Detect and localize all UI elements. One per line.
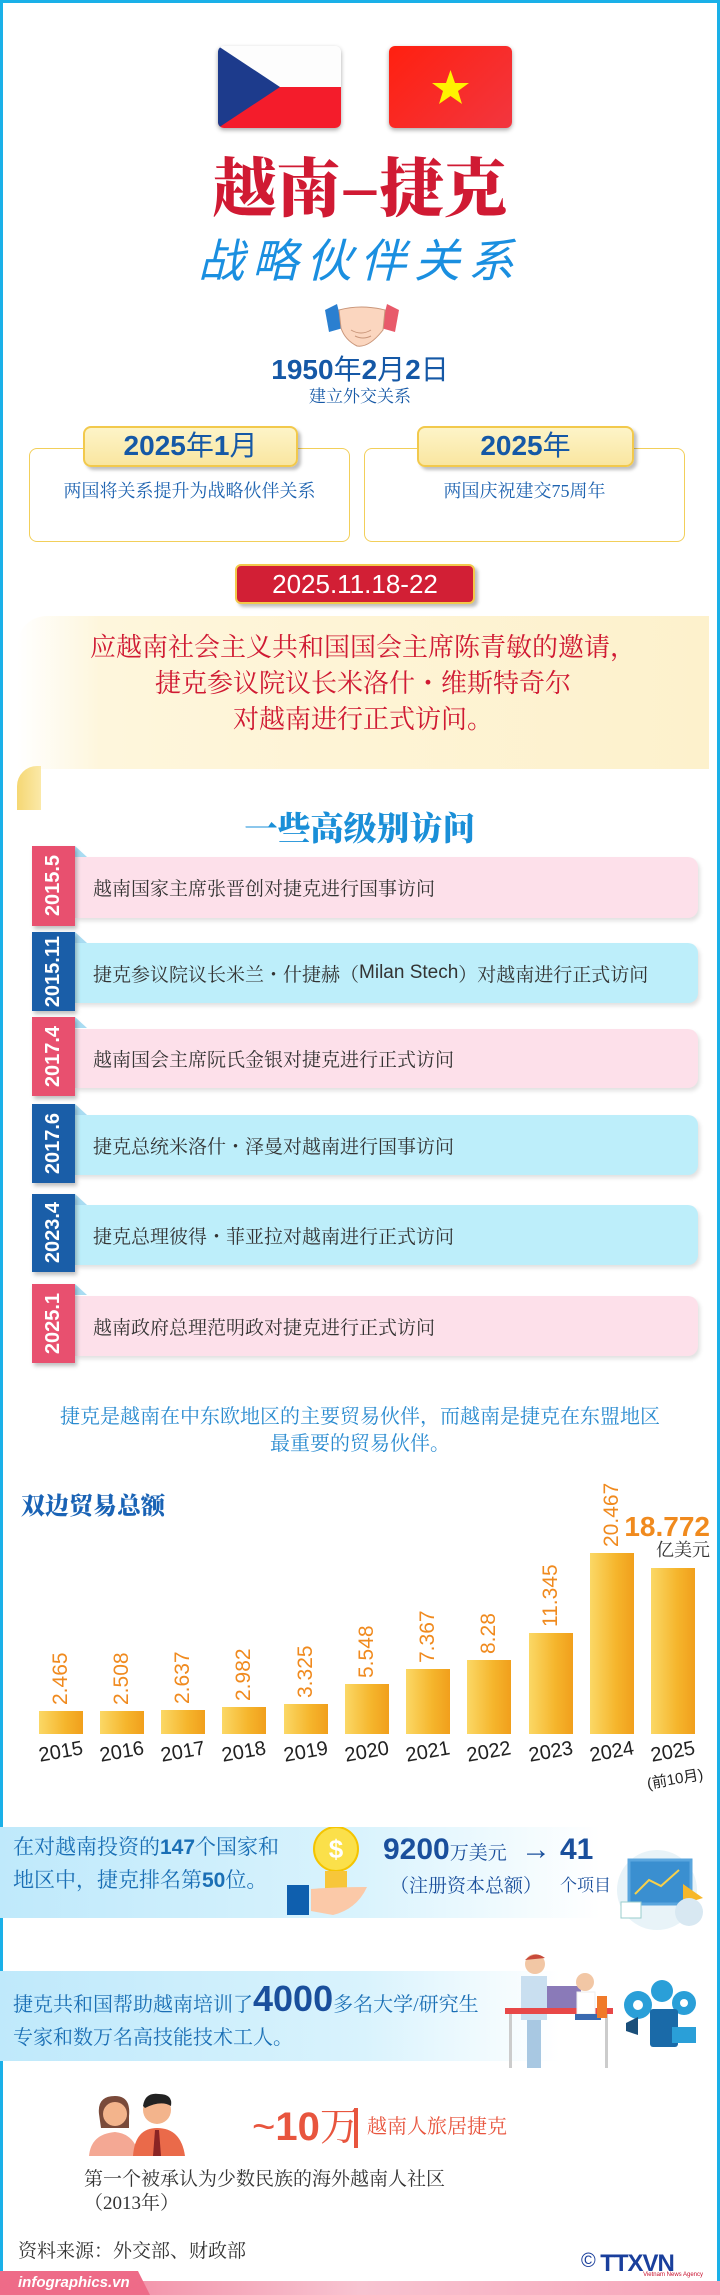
heading: trade chart: 双边贸易总额 <box>21 1486 165 1521</box>
bar chart: 亿美元 <box>656 1540 710 1560</box>
logo: TTXVN: © TTXVN <box>581 2250 674 2277</box>
text: training: 专家和数万名高技能技术工人。 <box>13 2027 293 2049</box>
text: investment ranking: 在对越南投资的147个国家和 <box>13 1835 279 1859</box>
logo: TTXVN: Vietnam News Agency <box>643 2272 703 2278</box>
bar chart: 18.772 <box>624 1511 710 1542</box>
icon: chart screen <box>617 1850 703 1930</box>
bar chart: 2024 <box>588 1737 636 1767</box>
icon: gears <box>624 1980 696 2047</box>
heading: visits: 一些高级别访问 <box>244 803 476 850</box>
bar chart: 3.325 <box>294 1645 317 1698</box>
bar chart: 5.548 <box>355 1625 378 1678</box>
bar chart: 2022 <box>465 1737 513 1767</box>
visit 2025.1: 2025.1 <box>42 1293 64 1354</box>
icon: czech flag <box>218 46 341 128</box>
visit 2017.6: 2017.6 <box>42 1113 64 1174</box>
bar chart: 2.508 <box>110 1652 133 1705</box>
banner: visit announcement: 捷克参议院议长米洛什・维斯特奇尔 <box>155 669 571 698</box>
icon: handshake <box>325 304 399 347</box>
date pill <box>235 564 475 604</box>
bar chart: 20.467 <box>600 1483 623 1547</box>
text: training: 捷克共和国帮助越南培训了4000多名大学/研究生 <box>13 1978 479 2019</box>
bar chart: 2.465 <box>49 1652 72 1705</box>
bar chart <box>37 1483 710 1793</box>
text: training <box>13 1978 479 2049</box>
footer bar <box>0 2281 720 2295</box>
icon: coin in hand <box>287 1827 367 1915</box>
date: established: 1950年2月2日 <box>271 354 449 385</box>
text: trade partners <box>60 1406 660 1455</box>
panel: 2025年1月: 两国将关系提升为战略伙伴关系 <box>64 481 316 501</box>
visit 2017.4: 越南国会主席阮氏金银对捷克进行正式访问 <box>93 1050 454 1071</box>
panel: 2025年 <box>364 448 685 542</box>
source: 资料来源：外交部、财政部 <box>18 2241 246 2262</box>
visit 2015.5: 2015.5 <box>42 855 64 917</box>
tab: 2025年 <box>417 426 634 467</box>
bar chart: 2017 <box>159 1737 207 1767</box>
tab: 2025年1月: 2025年1月 <box>124 430 257 461</box>
visit 2015.11 <box>32 932 701 1016</box>
title: 越南–捷克 <box>213 138 507 230</box>
panel: 2025年1月 <box>29 448 350 542</box>
bar chart: (前10月) <box>646 1766 705 1793</box>
visit 2015.11: Milan Stech <box>359 962 458 983</box>
text: 越南人旅居捷克 <box>367 2116 507 2138</box>
bar chart: 11.345 <box>539 1564 562 1627</box>
visit 2015.11: 捷克参议院议长米兰・什捷赫（ ）对越南进行正式访问 <box>93 964 648 986</box>
panel: investment: 个项目 <box>560 1876 611 1895</box>
bar chart: 2.637 <box>171 1651 194 1704</box>
bar chart: 2021 <box>404 1737 452 1767</box>
bar chart: 7.367 <box>416 1610 439 1663</box>
visit 2025.1: 越南政府总理范明政对捷克进行正式访问 <box>93 1318 435 1338</box>
footer: infographics.vn: infographics.vn <box>18 2274 130 2291</box>
icon: coin in hand: $ <box>329 1834 344 1864</box>
visit 2017.4: 2017.4 <box>42 1026 64 1087</box>
banner: visit announcement: 对越南进行正式访问。 <box>233 705 493 734</box>
date: established <box>271 354 449 406</box>
footer: infographics.vn <box>0 2271 150 2295</box>
bar chart: 2025 <box>649 1737 697 1767</box>
text: trade partners: 最重要的贸易伙伴。 <box>270 1433 450 1455</box>
bar chart: 2023 <box>527 1737 575 1767</box>
bar chart: 2020 <box>343 1737 391 1767</box>
subtitle: 战略伙伴关系 <box>198 225 522 291</box>
panel: investment: （注册资本总额） <box>390 1876 542 1897</box>
bar chart: 2019 <box>282 1737 330 1767</box>
text: investment ranking: 地区中，捷克排名第50位。 <box>13 1868 267 1892</box>
icon: office workers <box>505 1954 613 2068</box>
visit 2023.4: 2023.4 <box>42 1202 64 1264</box>
text: community <box>84 2168 445 2214</box>
text: community: 第一个被承认为少数民族的海外越南人社区 <box>84 2169 445 2190</box>
visit 2023.4: 捷克总理彼得・菲亚拉对越南进行正式访问 <box>93 1226 454 1248</box>
icon: vietnam flag <box>389 46 512 128</box>
stat: 10万: ~10万 <box>252 2104 360 2149</box>
tab: 2025年: 2025年 <box>480 430 571 461</box>
visit 2025.1 <box>32 1284 701 1368</box>
stat: 41: 41 <box>560 1833 593 1866</box>
date: established: 建立外交关系 <box>309 387 411 406</box>
bar chart: 2016 <box>98 1737 146 1767</box>
panel: training <box>0 1954 696 2068</box>
visit 2015.5: 越南国家主席张晋创对捷克进行国事访问 <box>93 879 435 900</box>
text: community: （2013年） <box>84 2193 179 2214</box>
text: trade partners: 捷克是越南在中东欧地区的主要贸易伙伴，而越南是捷克在东盟地区 <box>60 1406 660 1428</box>
visit 2023.4 <box>32 1194 701 1278</box>
visit 2017.4 <box>32 1017 701 1102</box>
text: investment ranking <box>13 1835 279 1892</box>
visit 2017.6 <box>32 1104 701 1188</box>
visit 2015.5 <box>32 846 701 932</box>
visit 2015.11: 2015.11 <box>42 936 64 1007</box>
banner curl <box>17 766 41 810</box>
visit 2017.6: 捷克总统米洛什・泽曼对越南进行国事访问 <box>93 1136 454 1158</box>
bar chart: 2015 <box>37 1737 85 1767</box>
date pill: 2025.11.18-22 <box>272 569 438 599</box>
panel: 2025年: 两国庆祝建交75周年 <box>444 481 606 501</box>
banner: visit announcement <box>17 616 709 769</box>
tab: 2025年1月 <box>83 426 298 467</box>
arrow: → <box>521 1833 551 1866</box>
bar chart: 8.28 <box>477 1613 500 1654</box>
banner: visit announcement: 应越南社会主义共和国国会主席陈青敏的邀请， <box>90 633 636 662</box>
bar chart: 2.982 <box>232 1648 255 1701</box>
stat: 9200: 9200万美元 <box>383 1833 507 1866</box>
bar chart: 2018 <box>220 1737 268 1767</box>
icon: couple <box>89 2094 185 2156</box>
panel: investment <box>0 1827 703 1930</box>
